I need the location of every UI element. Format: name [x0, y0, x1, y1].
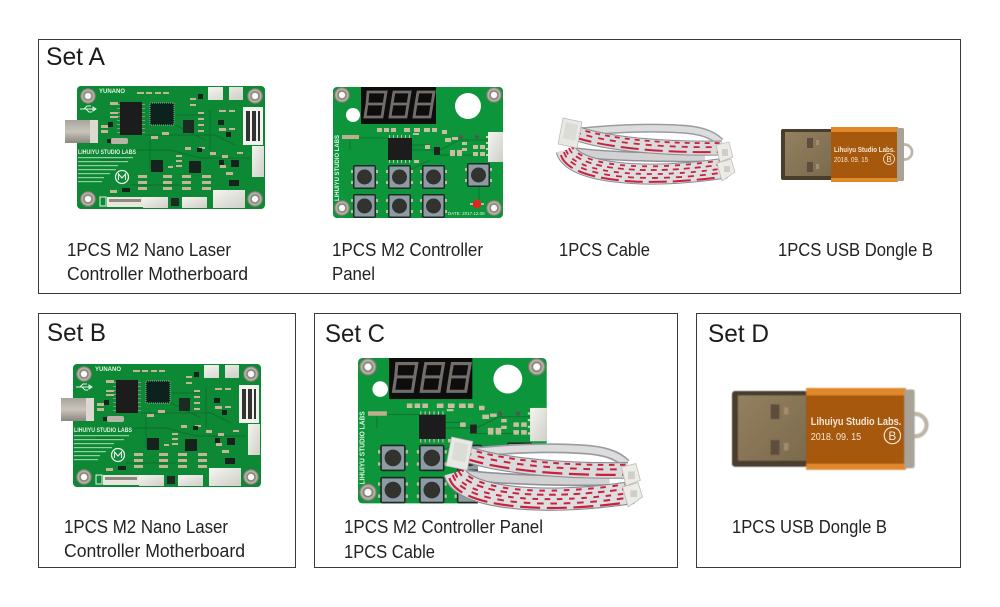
photo: cable	[446, 437, 643, 508]
photo: M2 Nano motherboard: YUNANO	[95, 367, 121, 373]
photo: M2 Nano motherboard: LIHUIYU STUDIO LABS	[78, 149, 137, 156]
photo: USB dongle B	[732, 388, 927, 470]
caption: motherboard: Controller Motherboard	[64, 541, 245, 561]
caption: motherboard	[67, 240, 248, 284]
photo: controller panel	[358, 358, 547, 503]
panel: Set A	[38, 40, 960, 294]
photo: USB dongle B	[781, 127, 912, 182]
caption: panel and cable: 1PCS Cable	[344, 542, 435, 562]
panel: Set C	[314, 314, 678, 568]
heading: Set C: Set C	[325, 320, 385, 348]
caption: motherboard	[64, 517, 245, 561]
photo: M2 controller panel: LIHUIYU STUDIO LABS	[334, 134, 341, 201]
photo: M2 Nano motherboard: LIHUIYU STUDIO LABS	[74, 427, 133, 434]
panel: Set D	[696, 314, 960, 568]
heading: Set A: Set A	[46, 43, 105, 71]
photo: M2 Nano motherboard	[61, 364, 261, 487]
caption: cable: 1PCS Cable	[559, 240, 650, 260]
photo: USB dongle B: B	[886, 155, 892, 164]
caption: motherboard: Controller Motherboard	[67, 264, 248, 284]
photo: M2 controller panel	[333, 87, 503, 218]
photo: M2 controller panel: DATE: 2017.12.08	[448, 211, 485, 216]
heading: Set D: Set D	[708, 320, 769, 348]
photo: USB dongle B: Lihuiyu Studio Labs.	[834, 145, 895, 154]
caption: controller panel	[332, 240, 483, 284]
caption: dongle: 1PCS USB Dongle B	[778, 240, 933, 260]
photo: USB dongle B: 2018. 09. 15	[811, 432, 861, 443]
caption: panel and cable: 1PCS M2 Controller Panel	[344, 517, 543, 537]
white cut-out behind the cable	[478, 450, 550, 506]
caption: controller panel: Panel	[332, 264, 375, 284]
photo: USB dongle B: Lihuiyu Studio Labs.	[811, 416, 901, 428]
caption: panel and cable	[344, 517, 543, 562]
caption: motherboard: 1PCS M2 Nano Laser	[64, 517, 228, 537]
photo: USB dongle B: B	[888, 429, 896, 443]
photo: controller panel: LIHUIYU STUDIO LABS	[358, 411, 367, 485]
photo: USB dongle B: 2018. 09. 15	[834, 157, 868, 164]
heading: Set B: Set B	[47, 319, 106, 347]
photo: cable	[558, 118, 735, 182]
caption: motherboard: 1PCS M2 Nano Laser	[67, 240, 231, 260]
panel: Set B	[38, 314, 296, 568]
caption: controller panel: 1PCS M2 Controller	[332, 240, 483, 260]
photo: M2 Nano motherboard	[65, 86, 265, 209]
caption: dongle: 1PCS USB Dongle B	[732, 517, 887, 537]
photo: M2 Nano motherboard: YUNANO	[99, 89, 125, 95]
